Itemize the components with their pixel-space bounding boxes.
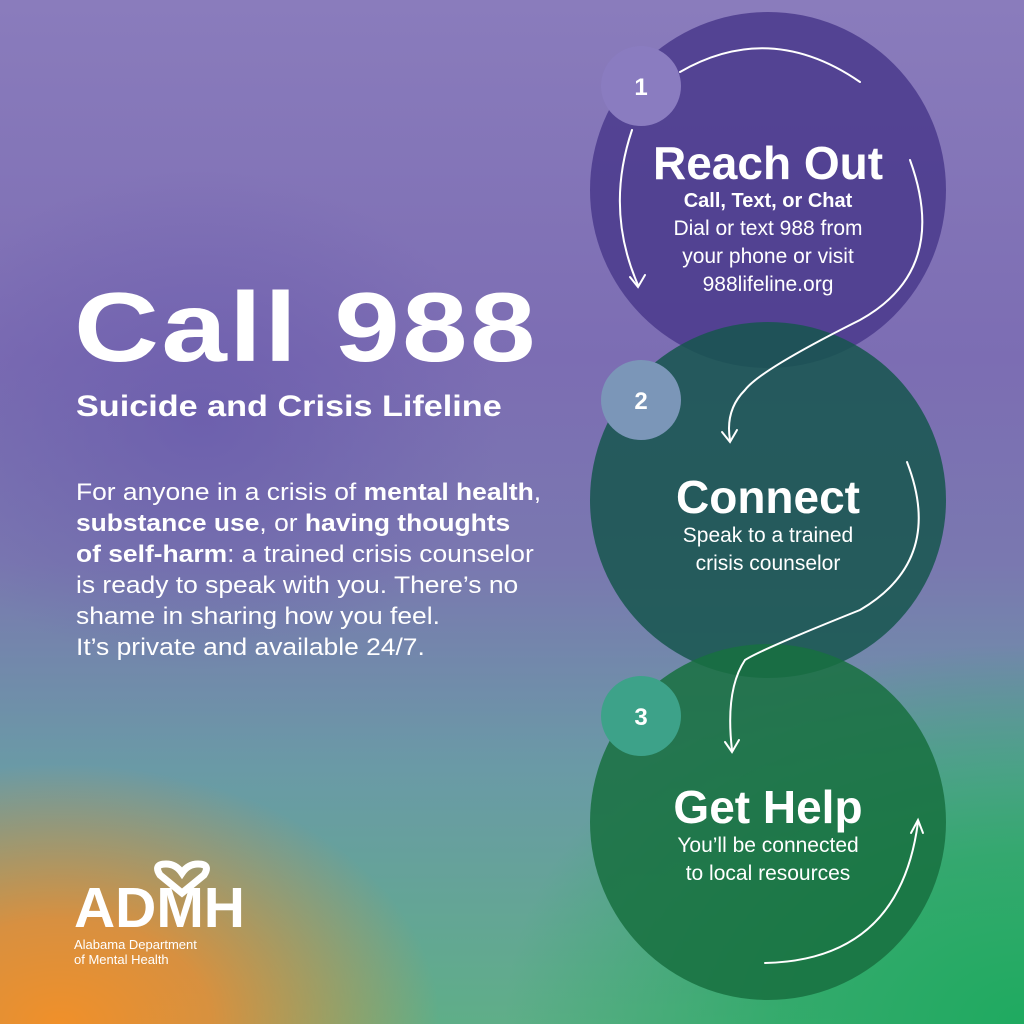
body text: is ready to speak with you. There’s no <box>76 572 518 599</box>
body text <box>76 479 541 661</box>
body text: shame in sharing how you feel. <box>76 603 440 630</box>
step 3 text: You’ll be connected <box>677 834 859 857</box>
body text: It’s private and available 24/7. <box>76 634 425 661</box>
step 2 text <box>676 471 860 575</box>
arrows <box>620 48 923 963</box>
step 1 text: Dial or text 988 from <box>673 217 863 240</box>
logo <box>74 860 245 967</box>
circle 1 <box>590 12 946 368</box>
step 2 text: Speak to a trained <box>683 524 853 547</box>
step 2 text: crisis counselor <box>696 552 840 575</box>
circles and arrows: 3 <box>634 704 648 731</box>
step 1 text: 988lifeline.org <box>703 273 833 296</box>
title: Call 988 <box>74 272 538 382</box>
body text: For anyone in a crisis of mental health, <box>76 479 541 506</box>
step 1 text: Call, Text, or Chat <box>684 190 852 212</box>
number badges <box>601 46 681 126</box>
step 3 text: to local resources <box>686 862 850 885</box>
logo: of Mental Health <box>74 952 169 967</box>
logo: Alabama Department <box>74 937 197 952</box>
step 2 text: Connect <box>676 471 860 523</box>
step 1 text: your phone or visit <box>682 245 854 268</box>
circle 3 <box>590 644 946 1000</box>
step 1 text <box>653 137 883 296</box>
logo: ADMH <box>74 876 245 940</box>
circle 2 <box>590 322 946 678</box>
body text: substance use, or having thoughts <box>76 510 510 537</box>
body text: of self-harm: a trained crisis counselor <box>76 541 534 568</box>
step 3 text: Get Help <box>673 781 863 833</box>
circles and arrows: 2 <box>634 388 648 415</box>
step 1 text: Reach Out <box>653 137 883 189</box>
circles and arrows: 1 <box>634 74 648 101</box>
subtitle: Suicide and Crisis Lifeline <box>76 390 502 423</box>
step 3 text <box>673 781 863 885</box>
